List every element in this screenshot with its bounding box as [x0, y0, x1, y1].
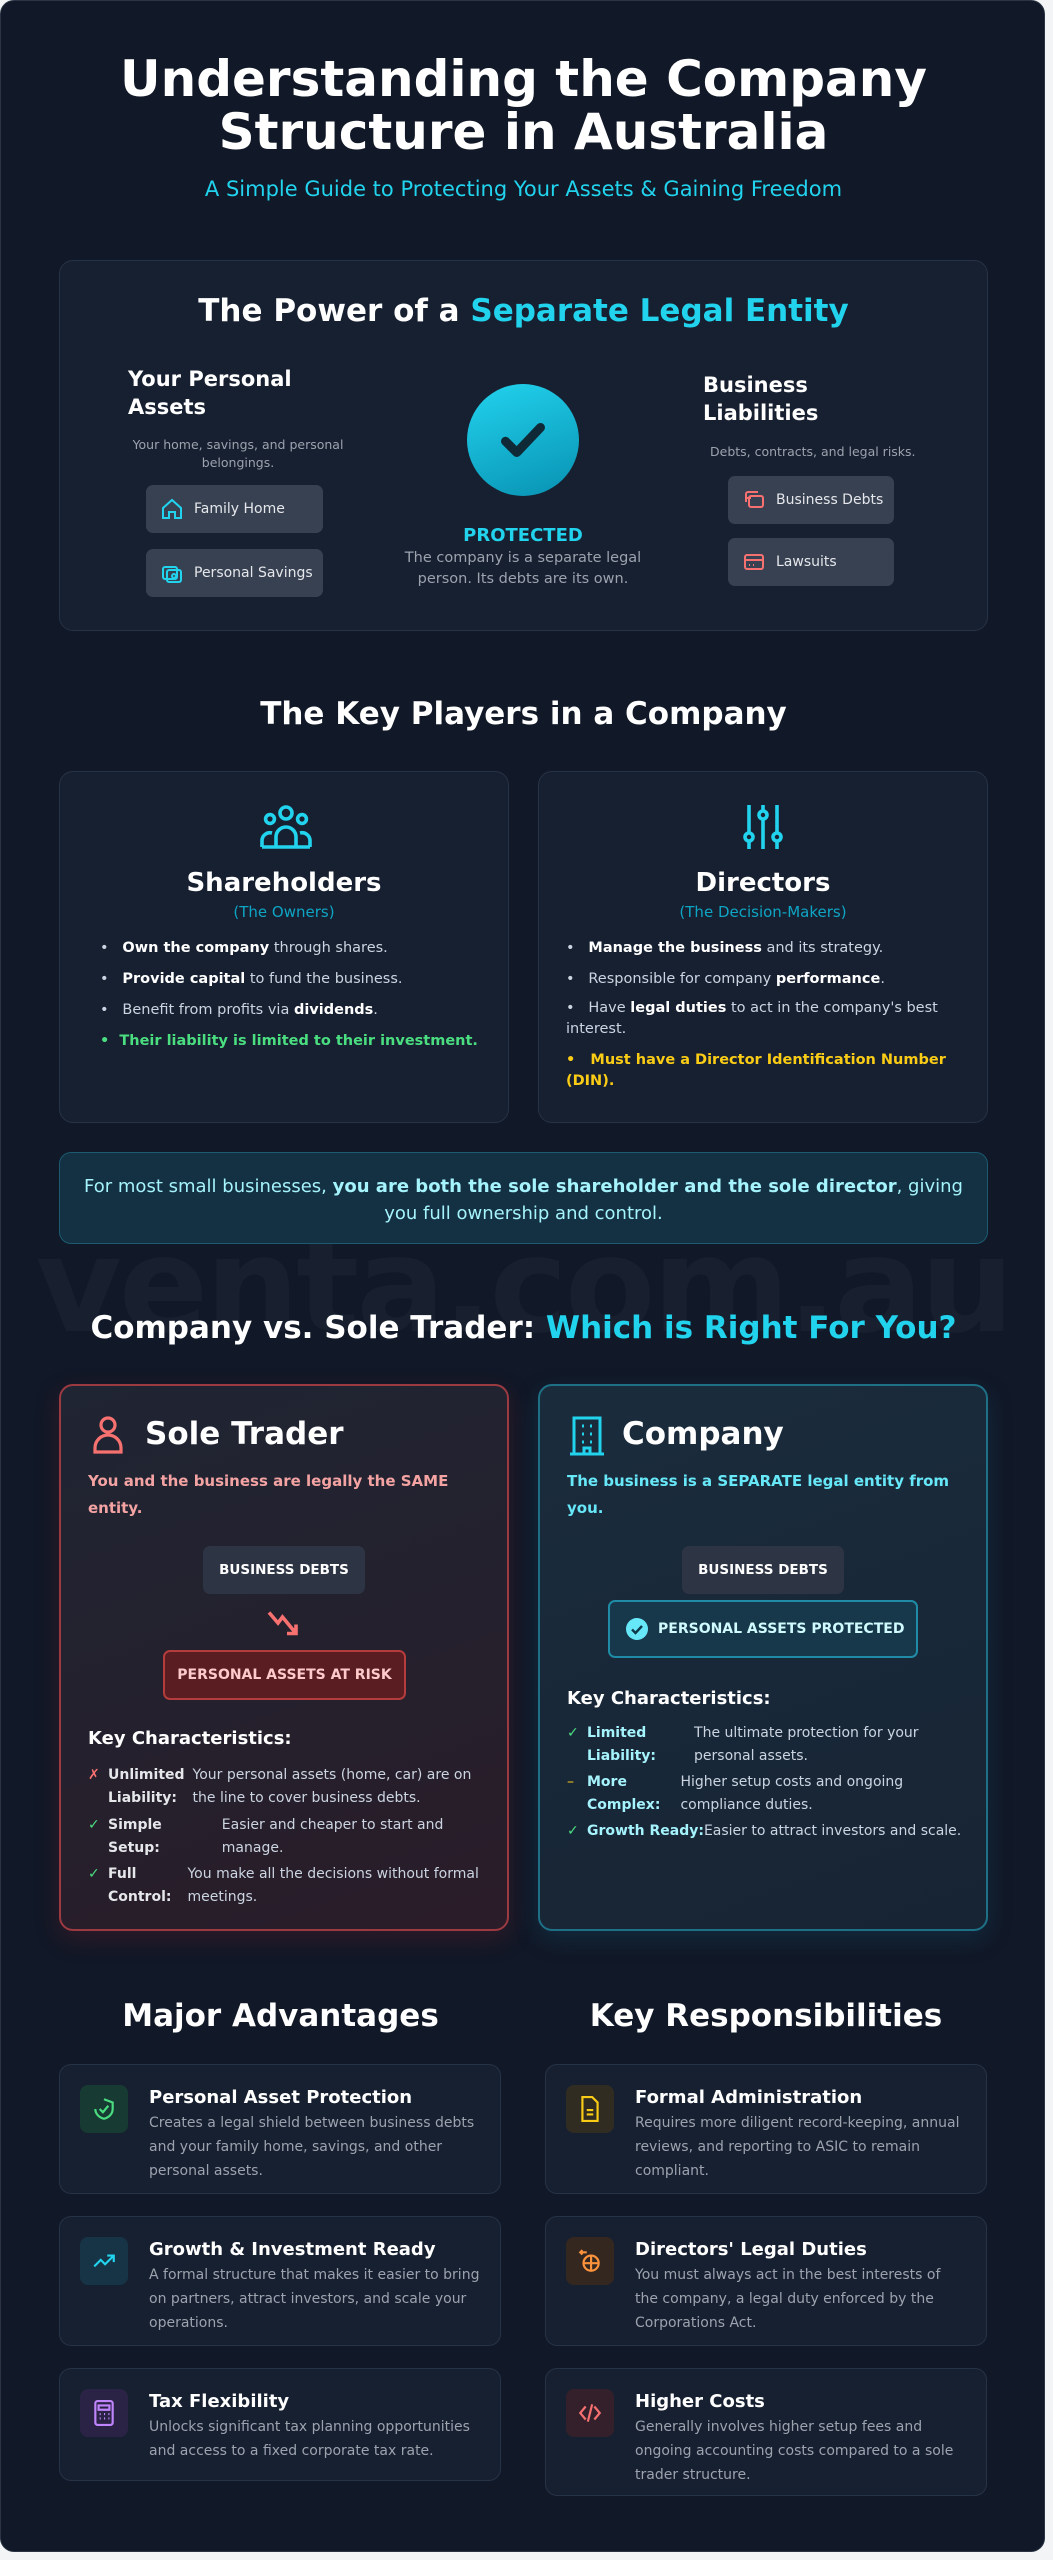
bullets: • Manage the business and its strategy.: [566, 940, 883, 956]
protected text: [404, 525, 641, 587]
title: Directors: [696, 868, 830, 898]
panel: company: ✓: [567, 1823, 579, 1839]
panel: sole trader: Setup:: [108, 1840, 160, 1856]
heading: key responsibilities: Key Responsibilities: [590, 1998, 942, 2034]
heading: major advantages: Major Advantages: [122, 1998, 439, 2034]
box: business debts: [203, 1546, 365, 1594]
bullets: • Responsible for company performance.: [566, 971, 885, 987]
box: business debts: BUSINESS DEBTS: [219, 1562, 349, 1578]
advantage: growth: [59, 2216, 501, 2346]
title: Structure in Australia: [219, 103, 828, 161]
panel: sole trader: Full: [108, 1866, 136, 1882]
icon: sliders: [743, 805, 783, 849]
icon: check shield: [467, 384, 579, 496]
heading: company vs sole trader: Company vs. Sole Trader: Which is Right For You?: [90, 1310, 957, 1346]
title: [120, 50, 927, 161]
panel: sole trader: ✓: [88, 1817, 100, 1833]
panel: company: Higher setup costs and ongoing compliance duties.: [680, 1774, 903, 1813]
callout: sole shareholder and director: [59, 1152, 988, 1244]
box: assets at risk: [163, 1650, 406, 1700]
panel: company: Limited: [587, 1725, 646, 1741]
icon: people: [260, 805, 312, 849]
advantage: tax: Tax Flexibility: [149, 2391, 289, 2412]
bullets: • Must have a Director Identification Number (DIN).: [566, 1052, 946, 1089]
panel: company: More: [587, 1774, 627, 1790]
bullets: • Have legal duties to act in the company's best interest.: [566, 1000, 938, 1037]
personal assets column: Your Personal: [128, 367, 292, 391]
responsibility: administration: [545, 2064, 987, 2194]
panel: sole trader: Easier and cheaper to start and manage.: [222, 1817, 443, 1856]
business liabilities column: Liabilities: [703, 401, 818, 425]
panel: sole trader: Unlimited: [108, 1767, 185, 1783]
bullets: • Benefit from profits via dividends.: [100, 1002, 378, 1018]
advantage: asset protection: Personal Asset Protection: [149, 2087, 412, 2108]
panel: company: Growth Ready:: [587, 1823, 704, 1839]
panel: separate legal entity: [59, 260, 988, 631]
panel: company: The ultimate protection for your personal assets.: [694, 1725, 919, 1764]
personal assets column: Your home, savings, and personal: [133, 437, 343, 452]
panel: company: ✓: [567, 1725, 579, 1741]
panel: sole trader: Liability:: [108, 1790, 177, 1806]
watermark: venta.com.au: [36, 1209, 1011, 1363]
advantage: tax: [59, 2368, 501, 2481]
title: Company: [622, 1416, 784, 1452]
box: business debts: [682, 1546, 844, 1594]
title: Shareholders: [186, 868, 382, 898]
responsibility: legal duties: Directors' Legal Duties: [635, 2239, 867, 2260]
protected text: PROTECTED: [463, 525, 583, 546]
title: Sole Trader: [145, 1416, 344, 1452]
heading: The Power of a Separate Legal Entity: [198, 293, 849, 329]
chip: business debts: [728, 476, 894, 524]
chip: family home: [146, 485, 323, 533]
box: assets at risk: PERSONAL ASSETS AT RISK: [177, 1667, 392, 1683]
box: assets protected: [608, 1600, 918, 1658]
panel: company: [538, 1384, 988, 1931]
panel: company: –: [567, 1774, 574, 1790]
business liabilities column: Business: [703, 373, 808, 397]
title: Understanding the Company: [120, 50, 927, 108]
statement: The business is a SEPARATE legal entity from you.: [567, 1472, 949, 1517]
panel: sole trader: Your personal assets (home, car) are on the line to cover business debts.: [193, 1767, 471, 1806]
responsibility: legal duties: You must always act in the best interests of the company, a legal duty enforced by the Corporations Act.: [635, 2267, 940, 2331]
box: assets protected: PERSONAL ASSETS PROTECTED: [658, 1621, 904, 1637]
panel: company: Complex:: [587, 1797, 660, 1813]
panel: directors: (The Decision-Makers): [679, 903, 847, 921]
responsibility: legal duties: [545, 2216, 987, 2346]
callout: sole shareholder and director: you full ownership and control.: [384, 1203, 663, 1224]
key characteristics: Key Characteristics:: [88, 1728, 292, 1749]
panel: shareholders: (The Owners): [233, 903, 335, 921]
business liabilities column: Debts, contracts, and legal risks.: [710, 444, 916, 459]
bullets: • Their liability is limited to their investment.: [100, 1033, 478, 1049]
advantage: tax: Unlocks significant tax planning opportunities and access to a fixed corporate tax rate.: [149, 2419, 470, 2459]
responsibility: higher costs: [545, 2368, 987, 2496]
personal assets column: [128, 367, 343, 597]
chip: family home: Family Home: [194, 501, 285, 517]
advantage: growth: A formal structure that makes it easier to bring on partners, attract investors, and scale your operations.: [149, 2267, 479, 2331]
bullets: • Own the company through shares.: [100, 940, 388, 956]
panel: sole trader: ✗: [88, 1767, 100, 1783]
bullets: [566, 940, 946, 1089]
personal assets column: belongings.: [202, 455, 274, 470]
panel: sole trader: Simple: [108, 1817, 162, 1833]
chip: savings: Personal Savings: [194, 565, 313, 581]
responsibility: higher costs: Generally involves higher setup fees and ongoing accounting costs compared to a sole trader structure.: [635, 2419, 953, 2483]
key characteristics: Key Characteristics:: [567, 1688, 771, 1709]
chip: lawsuits: Lawsuits: [776, 554, 837, 570]
responsibility: administration: Requires more diligent record-keeping, annual reviews, and reporting to ASIC to remain compliant.: [635, 2115, 959, 2179]
personal assets column: Assets: [128, 395, 206, 419]
advantage: asset protection: [59, 2064, 501, 2194]
arrow: down: [268, 1611, 298, 1636]
bullets: • Provide capital to fund the business.: [100, 971, 403, 987]
panel: company: Easier to attract investors and scale.: [704, 1823, 961, 1839]
advantage: asset protection: Creates a legal shield between business debts and your family home, savings, and other personal assets.: [149, 2115, 474, 2179]
protected text: person. Its debts are its own.: [418, 571, 628, 587]
panel: sole trader: ✓: [88, 1866, 100, 1882]
box: business debts: BUSINESS DEBTS: [698, 1562, 828, 1578]
bullets: [100, 940, 478, 1049]
chip: business debts: Business Debts: [776, 492, 883, 508]
panel: shareholders: [59, 771, 509, 1123]
panel: sole trader: Control:: [108, 1889, 171, 1905]
advantage: growth: Growth & Investment Ready: [149, 2239, 436, 2260]
callout: sole shareholder and director: For most small businesses, you are both the sole shareholder and the sole director, giving: [84, 1176, 963, 1197]
protected text: The company is a separate legal: [405, 550, 641, 566]
subtitle: A Simple Guide to Protecting Your Assets & Gaining Freedom: [205, 177, 842, 201]
panel: directors: [538, 771, 988, 1123]
chip: savings: [146, 549, 323, 597]
panel: sole trader: [59, 1384, 509, 1931]
icon: person: [93, 1416, 123, 1454]
business liabilities column: [703, 373, 916, 586]
panel: company: Liability:: [587, 1748, 656, 1764]
statement: You and the business are legally the SAME entity.: [88, 1472, 448, 1517]
responsibility: higher costs: Higher Costs: [635, 2391, 765, 2412]
chip: lawsuits: [728, 538, 894, 586]
icon: building: [570, 1416, 604, 1456]
responsibility: administration: Formal Administration: [635, 2087, 862, 2108]
panel: sole trader: You make all the decisions without formal meetings.: [187, 1866, 479, 1905]
heading: key players: The Key Players in a Company: [260, 696, 787, 732]
